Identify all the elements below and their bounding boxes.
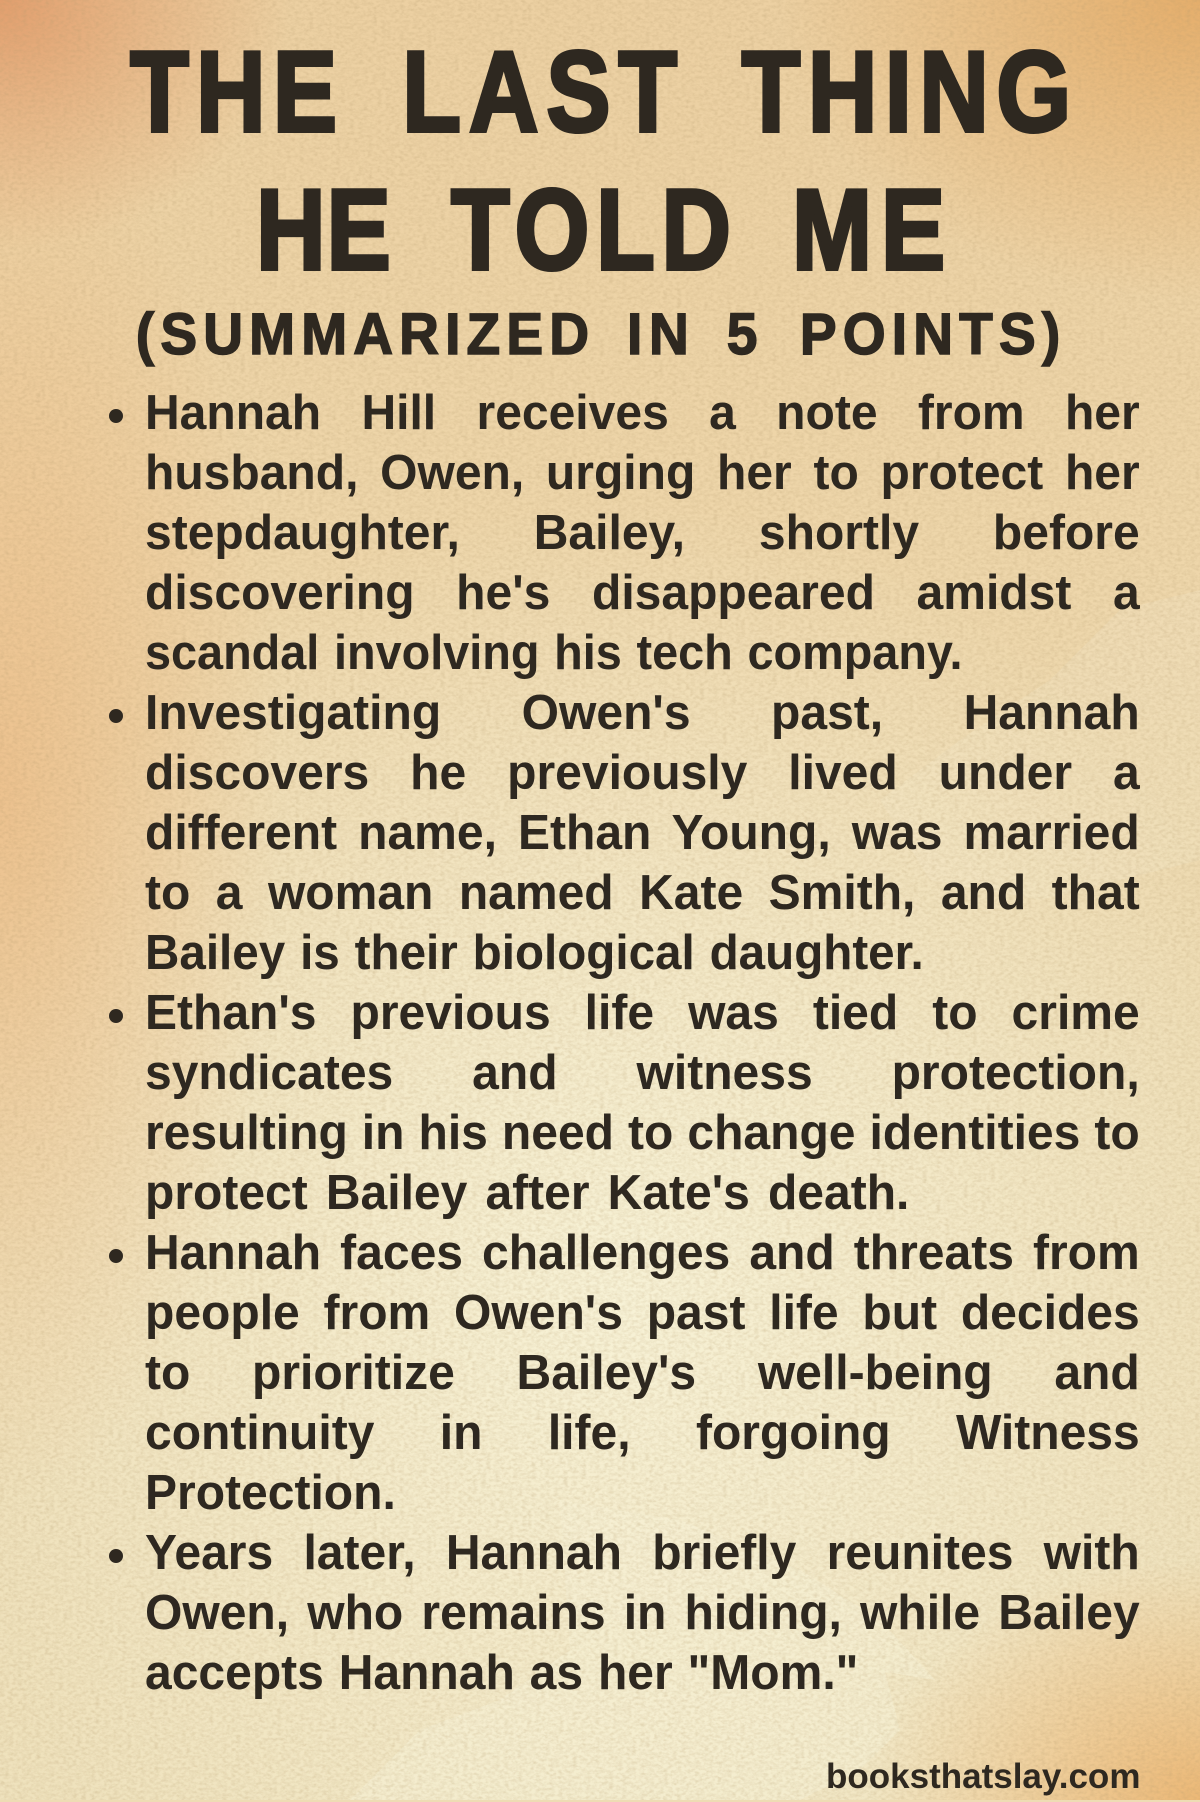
title line 1: THING <box>742 29 1071 156</box>
point 1 <box>145 386 1140 680</box>
point 4: continuity in life, forgoing Witness <box>145 1406 1140 1460</box>
point 3: resulting in his need to change identities to <box>145 1106 1140 1160</box>
point 2: Bailey is their biological daughter. <box>145 926 924 980</box>
footer: website: booksthatslay.com <box>826 1757 1140 1796</box>
point 2: to a woman named Kate Smith, and that <box>145 866 1140 920</box>
point 1: discovering he's disappeared amidst a <box>145 566 1140 620</box>
bullet 5 <box>109 1549 123 1563</box>
point 2: discovers he previously lived under a <box>145 746 1140 800</box>
subtitle: IN <box>627 302 689 366</box>
point 1: stepdaughter, Bailey, shortly before <box>145 506 1140 560</box>
point 4: Protection. <box>145 1466 396 1520</box>
point 5: accepts Hannah as her "Mom." <box>145 1646 858 1700</box>
subtitle: (SUMMARIZED <box>136 302 589 366</box>
title line 2: TOLD <box>451 167 731 294</box>
point 1: Hannah Hill receives a note from her <box>145 386 1140 440</box>
point 1: scandal involving his tech company. <box>145 626 962 680</box>
bullet 1 <box>109 409 123 423</box>
title line 1: LAST <box>402 29 677 156</box>
title line 1: THE <box>130 29 337 156</box>
point 3: syndicates and witness protection, <box>145 1046 1140 1100</box>
point 3: protect Bailey after Kate's death. <box>145 1166 909 1220</box>
point 2: different name, Ethan Young, was married <box>145 806 1140 860</box>
title line 2: ME <box>792 167 945 294</box>
point 3: Ethan's previous life was tied to crime <box>145 986 1140 1040</box>
point 3 <box>145 986 1140 1220</box>
point 2: Investigating Owen's past, Hannah <box>145 686 1140 740</box>
point 5 <box>145 1526 1140 1700</box>
point 4: people from Owen's past life but decides <box>145 1286 1140 1340</box>
title line 2: HE <box>256 167 391 294</box>
point 5: Owen, who remains in hiding, while Bailey <box>145 1586 1140 1640</box>
point 1: husband, Owen, urging her to protect her <box>145 446 1140 500</box>
subtitle: POINTS) <box>800 302 1060 366</box>
subtitle: 5 <box>727 302 757 366</box>
bullet 3 <box>109 1009 123 1023</box>
point 2 <box>145 686 1140 980</box>
point 4 <box>145 1226 1140 1520</box>
point 4: Hannah faces challenges and threats from <box>145 1226 1140 1280</box>
point 5: Years later, Hannah briefly reunites with <box>145 1526 1140 1580</box>
bullet 4 <box>109 1249 123 1263</box>
bullet 2 <box>109 709 123 723</box>
point 4: to prioritize Bailey's well-being and <box>145 1346 1140 1400</box>
